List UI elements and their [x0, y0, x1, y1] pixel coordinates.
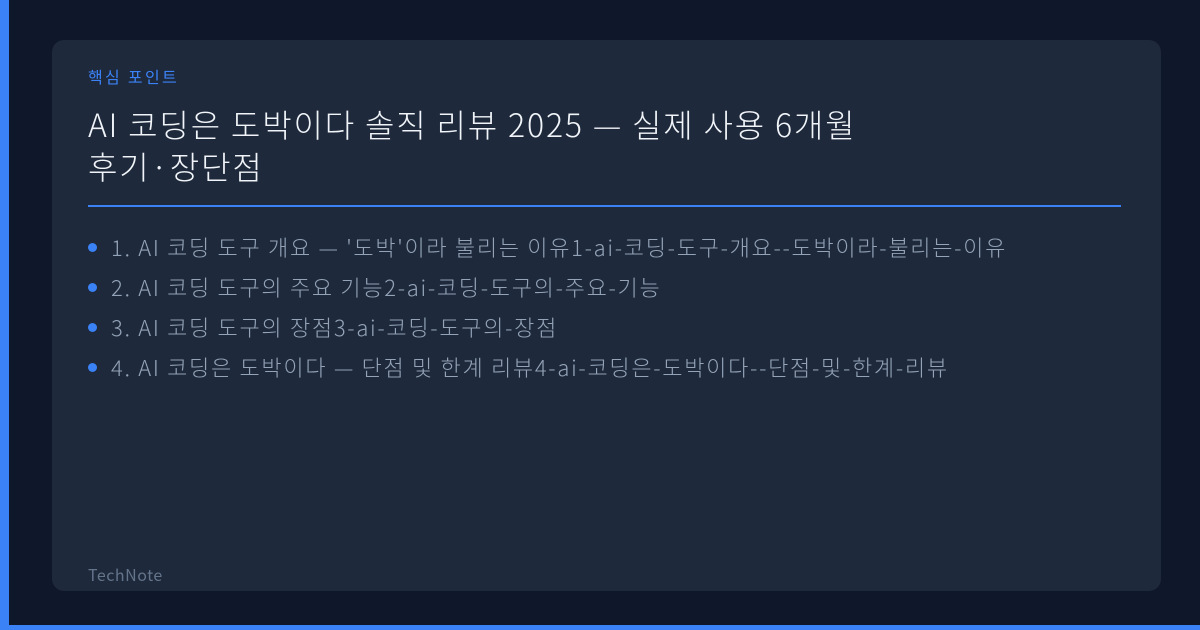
title: AI 코딩은 도박이다 솔직 리뷰 2025 — 실제 사용 6개월	[88, 101, 857, 147]
item 3: 3. AI 코딩 도구의 장점3-ai-코딩-도구의-장점	[111, 311, 558, 343]
item 2: 2. AI 코딩 도구의 주요 기능2-ai-코딩-도구의-주요-기능	[111, 271, 661, 303]
title: 후기·장단점	[88, 143, 264, 189]
label: 핵심 포인트	[88, 64, 179, 88]
item 4: 4. AI 코딩은 도박이다 — 단점 및 한계 리뷰4-ai-코딩은-도박이다--단점-및-한계-리뷰	[111, 351, 949, 383]
item 1: 1. AI 코딩 도구 개요 — '도박'이라 불리는 이유1-ai-코딩-도구-개요--도박이라-불리는-이유	[111, 231, 1007, 263]
footer: TechNote	[88, 562, 163, 586]
list	[88, 231, 1007, 383]
title	[88, 101, 857, 189]
